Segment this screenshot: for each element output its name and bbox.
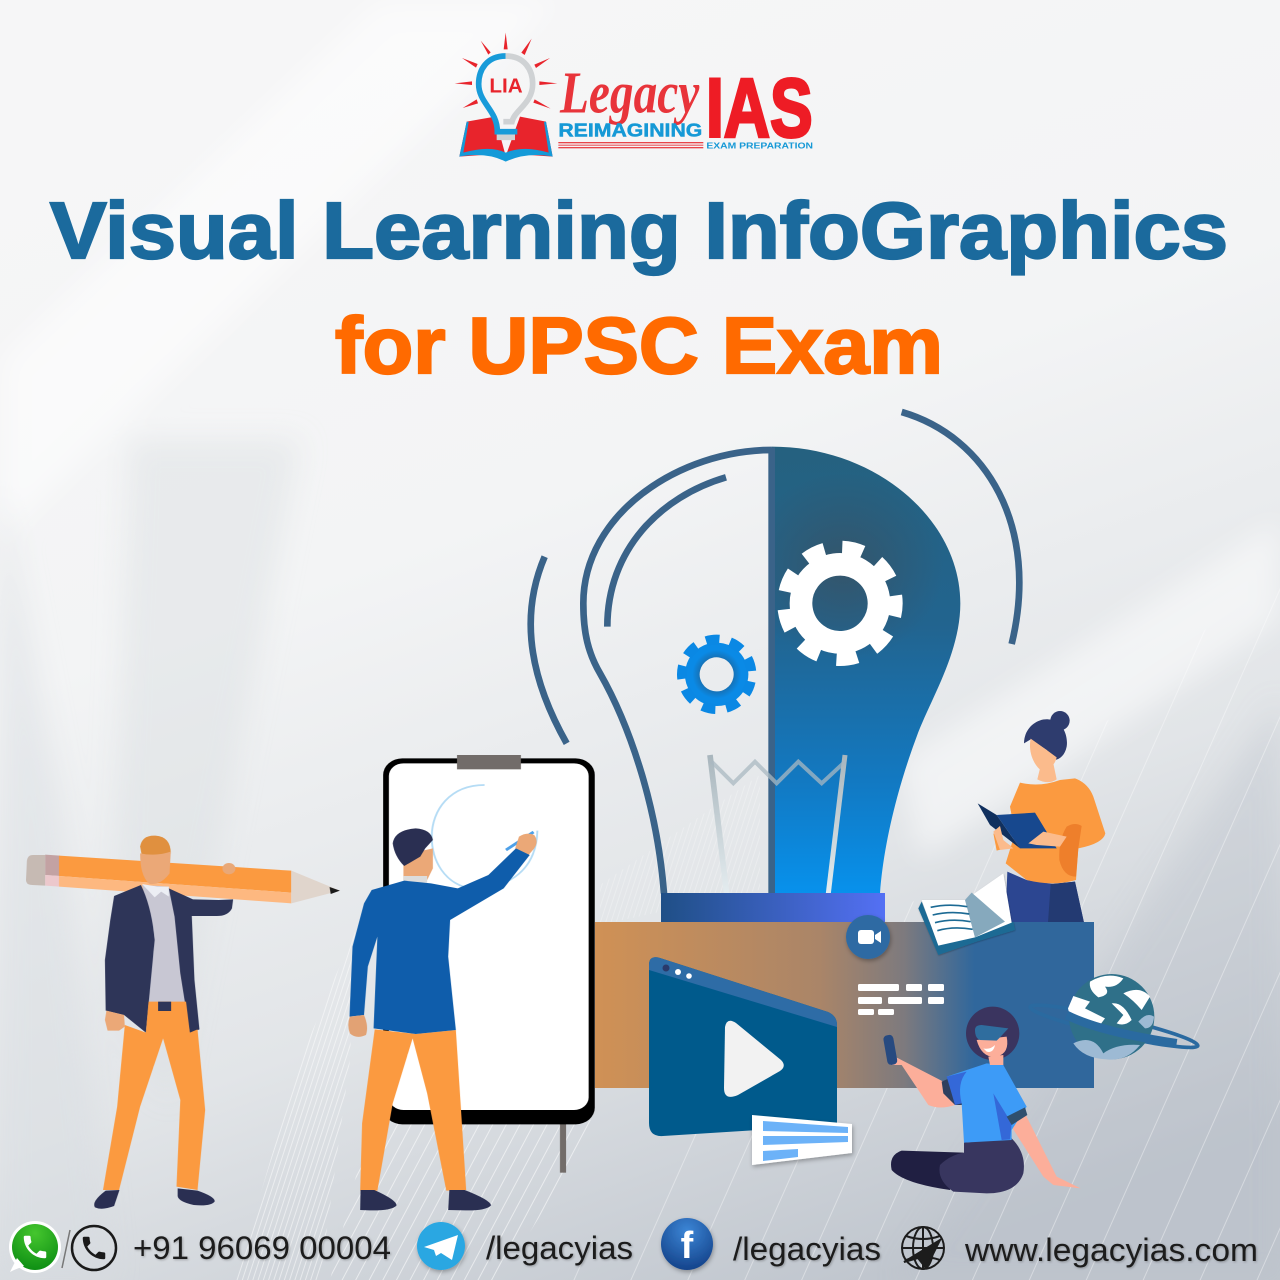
- VR woman lower arm: [1008, 1113, 1081, 1188]
- icon: globe: [902, 1227, 944, 1269]
- bulb inner arc: [607, 477, 726, 627]
- woman trousers: [1005, 872, 1084, 923]
- footer contact bar: [9, 1218, 1258, 1273]
- video player window: [649, 957, 852, 1165]
- man 2 hand: [348, 1015, 367, 1037]
- logo subtitle: EXAM PREPARATION: [706, 141, 813, 151]
- bulb base: [661, 893, 885, 923]
- planet ring back: [1028, 999, 1200, 1054]
- icon: facebook: [661, 1218, 713, 1270]
- light bulb illustration: [531, 412, 1019, 894]
- logo wordmark IAS: IAS: [706, 62, 813, 155]
- whiteboard: [383, 755, 595, 1173]
- separator slash: [62, 1230, 70, 1268]
- men and whiteboard: [26, 755, 595, 1210]
- man 2 raised hand: [515, 834, 537, 855]
- VR woman legs: [891, 1138, 1024, 1193]
- man 1 belt: [158, 1002, 171, 1011]
- caption card: [752, 1115, 852, 1165]
- woman book: [978, 803, 1067, 850]
- open book: [918, 873, 1015, 955]
- man 2 sweater: [349, 848, 530, 1034]
- icon: video camera badge: [846, 915, 890, 959]
- icon: telephone: [72, 1226, 116, 1270]
- logo: [455, 33, 813, 162]
- telegram handle: /legacyias: [486, 1230, 633, 1266]
- bulb left glow arc: [531, 557, 567, 743]
- icon: telegram: [417, 1222, 465, 1270]
- man 1 shirt: [142, 885, 186, 1003]
- website url: www.legacyias.com: [964, 1232, 1258, 1268]
- logo tagline: REIMAGINING: [558, 120, 702, 141]
- man 2 trousers: [360, 1029, 466, 1191]
- man 1 trousers: [103, 1002, 205, 1190]
- bulb divider: [768, 447, 775, 894]
- player body: [649, 957, 837, 1136]
- icon: large gear: [778, 541, 902, 665]
- VR woman remote: [883, 1034, 898, 1066]
- man 1 hand: [105, 1011, 125, 1031]
- filament: [710, 755, 845, 893]
- man 1 jacket: [105, 885, 233, 1033]
- icon: small gear: [676, 633, 758, 715]
- planet ring front: [1067, 1015, 1177, 1043]
- icon: bulb: [479, 56, 533, 137]
- VR woman raised arm: [887, 1053, 955, 1107]
- man 2 shoes: [360, 1190, 491, 1210]
- man with pencil: [94, 836, 233, 1209]
- card text lines: [858, 984, 944, 1015]
- standing woman reading: [978, 711, 1105, 923]
- man at board: [348, 828, 537, 1210]
- bulb right half: [772, 447, 960, 893]
- player title bar: [649, 957, 837, 1027]
- VR woman head: [966, 1007, 1019, 1065]
- planet: [1028, 974, 1200, 1060]
- facebook handle: /legacyias: [733, 1231, 881, 1267]
- phone number: +91 96069 00004: [133, 1230, 391, 1266]
- title line 1: Visual Learning InfoGraphics: [50, 186, 1228, 275]
- icon: open book: [459, 117, 553, 162]
- logo wordmark Legacy: Legacy: [559, 60, 700, 126]
- icon: whatsapp: [9, 1221, 61, 1273]
- icon: facebook: f: [681, 1225, 694, 1267]
- logo rule lines: [558, 142, 703, 148]
- planet globe: [1068, 974, 1154, 1060]
- VR woman shirt: [942, 1063, 1027, 1143]
- player dots: [662, 964, 692, 979]
- man 2 neck and head: [393, 828, 433, 883]
- title: [50, 186, 1228, 390]
- logo mark text: LIA: [489, 75, 523, 98]
- icon: light rays: [455, 33, 557, 109]
- pencil: [26, 855, 340, 903]
- woman sweater: [993, 778, 1105, 883]
- bulb right glow arc: [902, 412, 1019, 644]
- content card: [595, 922, 1094, 1088]
- title line 2: for UPSC Exam: [335, 301, 943, 390]
- bulb dark glow: [775, 502, 918, 631]
- man 1 shoes: [94, 1188, 215, 1209]
- sitting woman with VR headset: [883, 1007, 1081, 1193]
- man 1 head: [140, 836, 171, 884]
- bulb left outline: [583, 450, 772, 893]
- man 2 pen: [506, 832, 534, 850]
- icon: play triangle: [724, 1021, 784, 1097]
- woman head: [1024, 711, 1070, 782]
